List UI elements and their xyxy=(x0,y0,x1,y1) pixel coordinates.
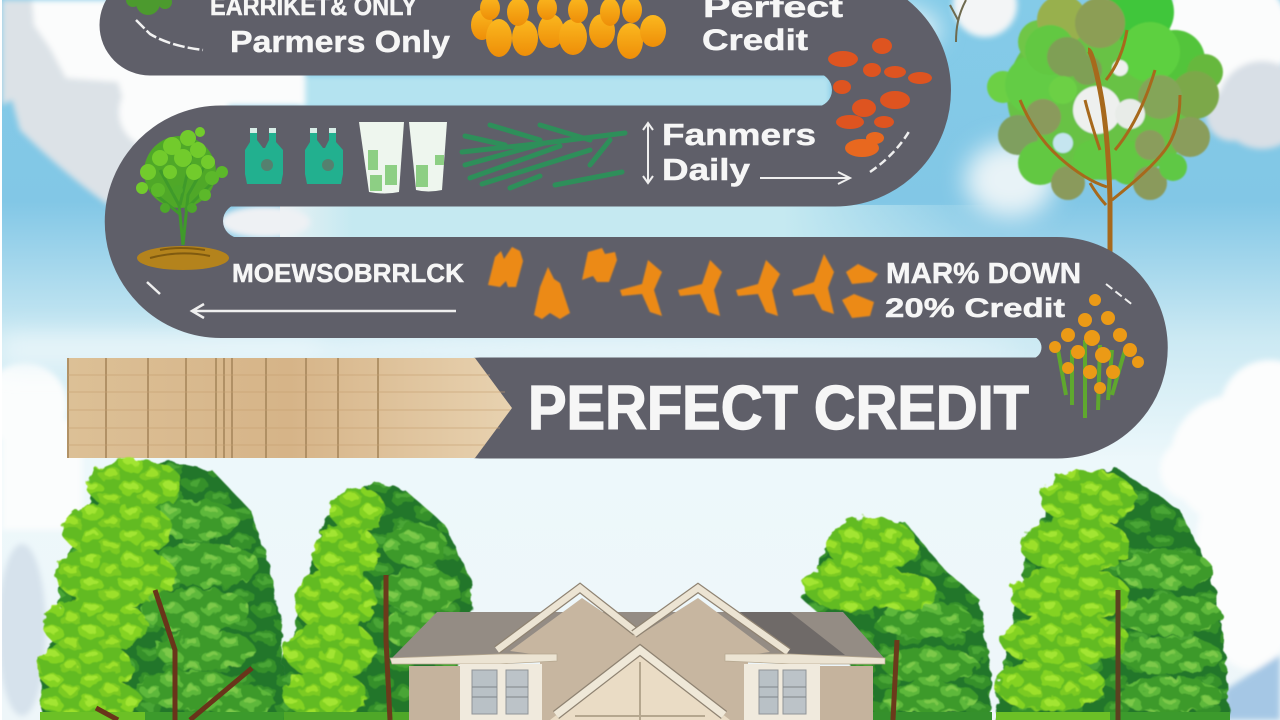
wood arrow sign xyxy=(67,358,512,458)
icon: red orange pieces xyxy=(828,38,932,157)
arrow: road curve xyxy=(870,130,910,172)
winding road xyxy=(150,25,1117,408)
icon: green grass xyxy=(462,125,625,188)
text: 20 percent credit: 20% Credit xyxy=(885,293,1065,323)
icon: vertical double arrow xyxy=(643,123,653,183)
eaves xyxy=(390,654,557,664)
front gable xyxy=(550,650,730,720)
text: parmers only: Parmers Only xyxy=(230,24,451,59)
icon: glasses xyxy=(359,122,447,194)
icon: top left herbs xyxy=(126,0,172,15)
right lower wall xyxy=(820,666,873,720)
tree: bottom third xyxy=(803,517,992,720)
tree: bottom far right xyxy=(995,470,1230,720)
text: mar percent down: MAR% DOWN xyxy=(886,258,1081,290)
arrow: curve right xyxy=(1106,284,1134,306)
tree: top right xyxy=(987,0,1223,252)
arrow: leftward xyxy=(192,304,456,318)
icon: shrub with soil xyxy=(136,127,229,270)
panel: farmers daily row xyxy=(136,117,910,270)
main roof xyxy=(392,612,884,658)
text: credit: Credit xyxy=(702,24,808,57)
tree: bottom far left xyxy=(37,459,287,720)
arrow: small dash left xyxy=(147,282,160,294)
icon: flower bush xyxy=(1049,294,1144,418)
right window xyxy=(744,664,820,720)
icon: teal bottles xyxy=(245,128,343,184)
house xyxy=(390,588,885,720)
left window xyxy=(460,664,542,720)
icon: orange pieces xyxy=(488,247,878,319)
panel: third row xyxy=(147,247,1144,418)
upper walls and gables xyxy=(497,588,788,720)
title: perfect credit: PERFECT CREDIT xyxy=(528,374,1029,443)
arrow: daily xyxy=(760,172,850,184)
tree: bottom second xyxy=(283,482,473,720)
pale strip behind road gap xyxy=(280,205,1000,237)
text: daily: Daily xyxy=(662,152,751,187)
panel: farmers only row xyxy=(126,0,932,157)
arrow: top row dashed xyxy=(136,20,203,50)
small bare branch top xyxy=(950,0,966,42)
text: moewsobrrlck: MOEWSOBRRLCK xyxy=(232,258,464,288)
icon: orange fruit cluster xyxy=(471,0,666,59)
text: fanmers: Fanmers xyxy=(662,117,816,152)
left lower wall xyxy=(409,666,461,720)
